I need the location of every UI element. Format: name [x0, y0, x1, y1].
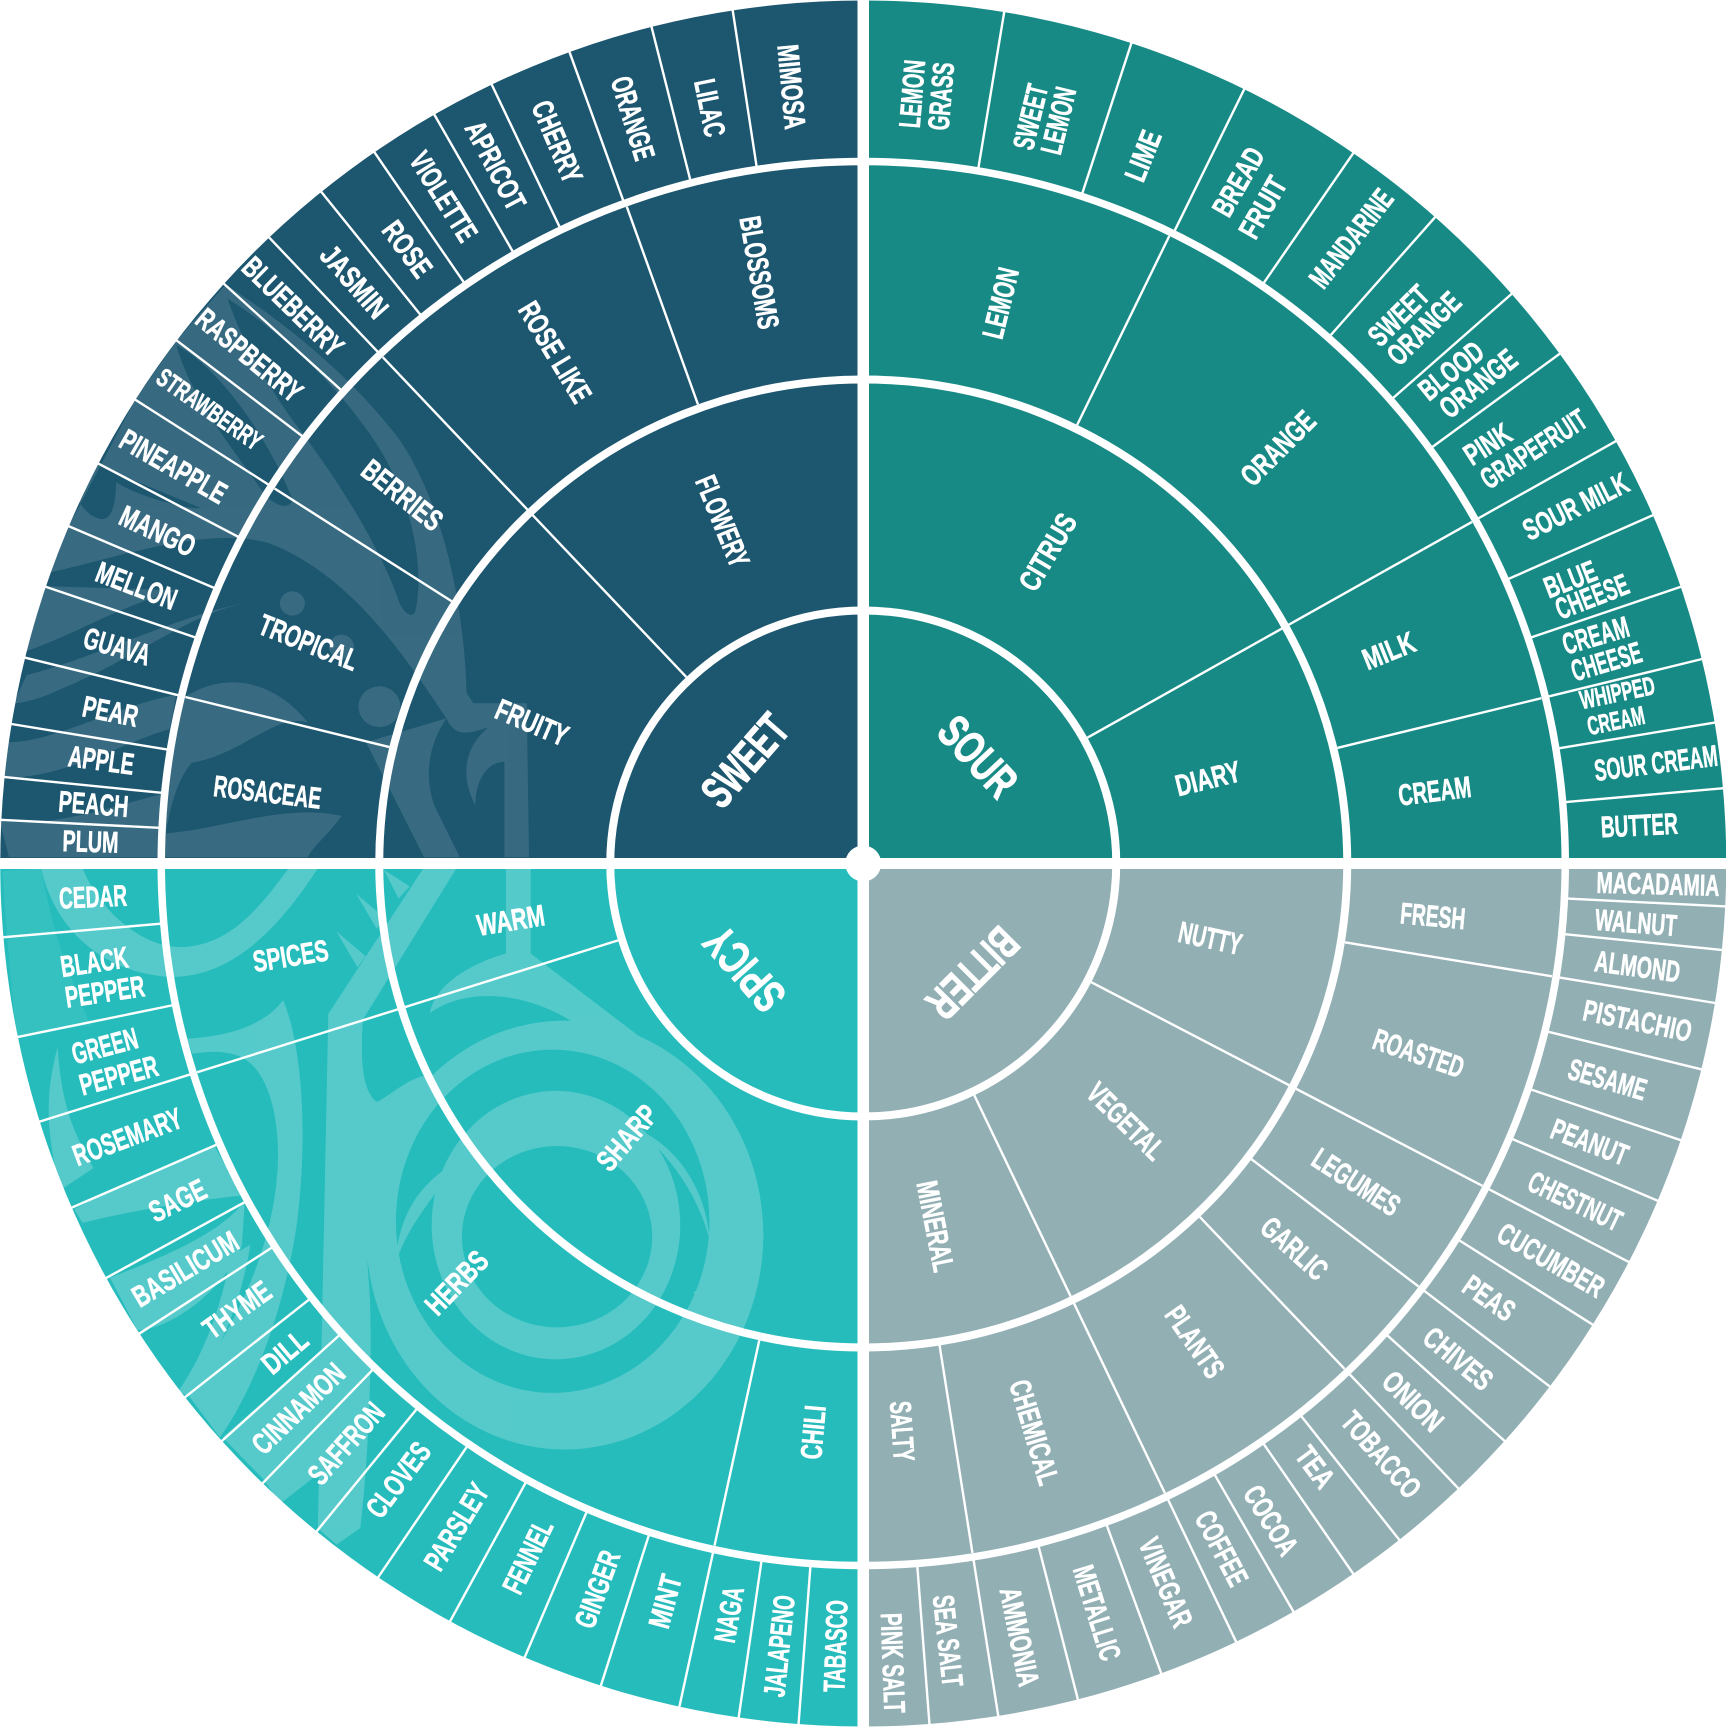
- label: lilac: LILAC: [687, 76, 731, 140]
- label: black pepper: BLACK: [58, 941, 131, 984]
- label: jasmin: JASMIN: [313, 239, 394, 325]
- label: rosemary: ROSEMARY: [68, 1102, 187, 1173]
- label: sweet orange: SWEET: [1362, 279, 1436, 353]
- label: green pepper: GREEN: [68, 1022, 142, 1071]
- label: butter: BUTTER: [1600, 808, 1679, 844]
- label: sesame: SESAME: [1564, 1053, 1650, 1107]
- watermark: tribal pattern over sweet quadrant: [0, 285, 529, 857]
- label: sharp: SHARP: [590, 1099, 665, 1178]
- label: blossoms: BLOSSOMS: [732, 214, 785, 332]
- label: ginger: GINGER: [569, 1546, 627, 1633]
- label: garlic: GARLIC: [1254, 1211, 1334, 1287]
- label: blue cheese: BLUE: [1539, 555, 1602, 605]
- label: dill: DILL: [256, 1324, 315, 1381]
- label: rose like: ROSE LIKE: [511, 296, 598, 409]
- label: strawberry: STRAWBERRY: [151, 362, 268, 456]
- label: chestnut: CHESTNUT: [1523, 1166, 1627, 1238]
- label: whipped cream: [1577, 670, 1663, 742]
- watermark: tribal spiral over spicy quadrant: [3, 868, 763, 1545]
- label: warm: WARM: [475, 899, 547, 943]
- label: sweet lemon: LEMON: [1035, 84, 1083, 158]
- label: lime: LIME: [1119, 126, 1169, 186]
- label: bread fruit: FRUIT: [1233, 171, 1294, 245]
- label: black pepper: [58, 940, 147, 1015]
- label: metallic: METALLIC: [1066, 1561, 1127, 1665]
- label: cream cheese: CHEESE: [1567, 636, 1646, 688]
- label: sweet lemon: SWEET: [1007, 81, 1055, 153]
- label: spices: SPICES: [251, 934, 331, 979]
- label: lemon grass: [894, 59, 961, 132]
- label: plants: PLANTS: [1158, 1300, 1230, 1385]
- label: cocoa: COCOA: [1236, 1480, 1304, 1562]
- label: cream cheese: [1559, 609, 1646, 688]
- heading: spicy: SPICY: [693, 916, 796, 1022]
- label: orange: ORANGE: [1234, 405, 1323, 493]
- label: mint: MINT: [643, 1571, 689, 1632]
- label: milk: MILK: [1358, 626, 1421, 677]
- label: mimosa: MIMOSA: [770, 43, 811, 131]
- label: pink grapefruit: [1458, 379, 1593, 497]
- label: apple: APPLE: [66, 740, 136, 782]
- label: peas: PEAS: [1456, 1269, 1521, 1328]
- label: cinnamon: CINNAMON: [246, 1357, 352, 1461]
- label: pink grapefruit: GRAPEFRUIT: [1475, 403, 1593, 496]
- label: jalapeno: JALAPENO: [758, 1594, 802, 1699]
- label: bread fruit: [1203, 142, 1301, 245]
- label: tobacco: TOBACCO: [1334, 1405, 1427, 1505]
- label: green pepper: [68, 1019, 162, 1102]
- label: berries: BERRIES: [355, 454, 449, 538]
- panel: sweet quadrant: [0, 0, 863, 864]
- label: chemical: CHEMICAL: [1002, 1376, 1065, 1489]
- heading: sour: SOUR: [928, 705, 1028, 808]
- label: pink grapefruit: PINK: [1458, 417, 1518, 472]
- label: lemon: LEMON: [977, 264, 1026, 342]
- label: lemon grass: GRASS: [923, 61, 961, 132]
- label: mellon: MELLON: [91, 556, 181, 617]
- label: sweet orange: [1362, 266, 1468, 372]
- label: thyme: THYME: [197, 1275, 278, 1346]
- label: naga: NAGA: [709, 1584, 751, 1645]
- label: vinegar: VINEGAR: [1132, 1533, 1199, 1633]
- label: peach: PEACH: [57, 786, 130, 824]
- label: orange: ORANGE: [604, 73, 661, 164]
- label: tropical: TROPICAL: [254, 609, 363, 678]
- label: chives: CHIVES: [1416, 1321, 1499, 1398]
- label: parsley: PARSLEY: [418, 1478, 496, 1577]
- label: bread fruit: BREAD: [1206, 142, 1272, 222]
- label: black pepper: PEPPER: [63, 970, 147, 1015]
- label: blue cheese: [1539, 546, 1634, 628]
- label: legumes: LEGUMES: [1306, 1142, 1406, 1223]
- label: diary: DIARY: [1172, 755, 1244, 803]
- label: cherry: CHERRY: [524, 96, 588, 188]
- label: sage: SAGE: [144, 1173, 212, 1229]
- label: sweet orange: ORANGE: [1381, 286, 1468, 372]
- label: whipped cream: WHIPPED: [1577, 670, 1658, 715]
- label: saffron: SAFFRON: [302, 1396, 392, 1492]
- label: tea: TEA: [1288, 1440, 1341, 1495]
- label: raspberry: RASPBERRY: [189, 302, 309, 409]
- label: flowery: FLOWERY: [688, 471, 755, 572]
- panel: bitter quadrant: [863, 864, 1726, 1726]
- label: herbs: HERBS: [419, 1244, 495, 1322]
- label: cedar: CEDAR: [58, 880, 128, 916]
- label: violette: VIOLETTE: [402, 146, 484, 248]
- panel: spicy quadrant: [0, 864, 863, 1726]
- sweet sector: [0, 0, 863, 864]
- label: cream: CREAM: [1396, 771, 1473, 813]
- spicy sector: [0, 864, 863, 1726]
- label: green pepper: PEPPER: [76, 1050, 162, 1102]
- label: sweet lemon: [1007, 77, 1083, 160]
- label: apricot: APRICOT: [458, 116, 532, 216]
- label: basilicum: BASILICUM: [127, 1225, 245, 1314]
- label: lemon grass: LEMON: [894, 59, 932, 129]
- label: mandarine: MANDARINE: [1303, 183, 1401, 295]
- bitter sector: [863, 864, 1726, 1726]
- label: pineapple: PINEAPPLE: [114, 423, 232, 511]
- sour sector: [863, 0, 1726, 864]
- label: mango: MANGO: [114, 500, 200, 564]
- label: tabasco: TABASCO: [818, 1599, 855, 1693]
- heading: bitter: BITTER: [916, 917, 1029, 1030]
- label: blood orange: BLOOD: [1413, 335, 1491, 407]
- panel: sour quadrant: [863, 0, 1726, 864]
- label: rose: ROSE: [375, 215, 438, 284]
- label: blueberry: BLUEBERRY: [235, 251, 350, 364]
- label: almond: ALMOND: [1593, 945, 1682, 989]
- label: pear: PEAR: [80, 690, 141, 734]
- label: citrus: CITRUS: [1013, 508, 1084, 597]
- label: fruity: FRUITY: [490, 693, 573, 753]
- label: sour milk: SOUR MILK: [1518, 467, 1635, 547]
- label: blue cheese: CHEESE: [1551, 568, 1634, 626]
- label: salty: SALTY: [883, 1400, 920, 1462]
- label: coffee: COFFEE: [1188, 1506, 1254, 1592]
- label: chili: CHILI: [795, 1404, 833, 1461]
- label: cream cheese: CREAM: [1559, 611, 1633, 662]
- label: mineral: MINERAL: [910, 1178, 960, 1275]
- label: rosaceae: ROSACEAE: [212, 770, 323, 816]
- label: onion: ONION: [1375, 1365, 1450, 1439]
- label: fennel: FENNEL: [497, 1515, 560, 1599]
- label: fresh: FRESH: [1399, 897, 1467, 936]
- label: walnut: WALNUT: [1594, 904, 1678, 943]
- label: plum: PLUM: [62, 825, 119, 860]
- label: cucumber: CUCUMBER: [1491, 1217, 1610, 1305]
- label: blood orange: ORANGE: [1433, 343, 1524, 425]
- label: peanut: PEANUT: [1546, 1113, 1633, 1173]
- label: nutty: NUTTY: [1175, 916, 1245, 962]
- label: roasted: ROASTED: [1369, 1023, 1468, 1085]
- label: guava: GUAVA: [80, 622, 154, 673]
- label: whipped cream: CREAM: [1584, 700, 1647, 741]
- label: vegetal: VEGETAL: [1080, 1076, 1171, 1167]
- heading: sweet: SWEET: [691, 703, 799, 817]
- label: cloves: CLOVES: [360, 1436, 438, 1525]
